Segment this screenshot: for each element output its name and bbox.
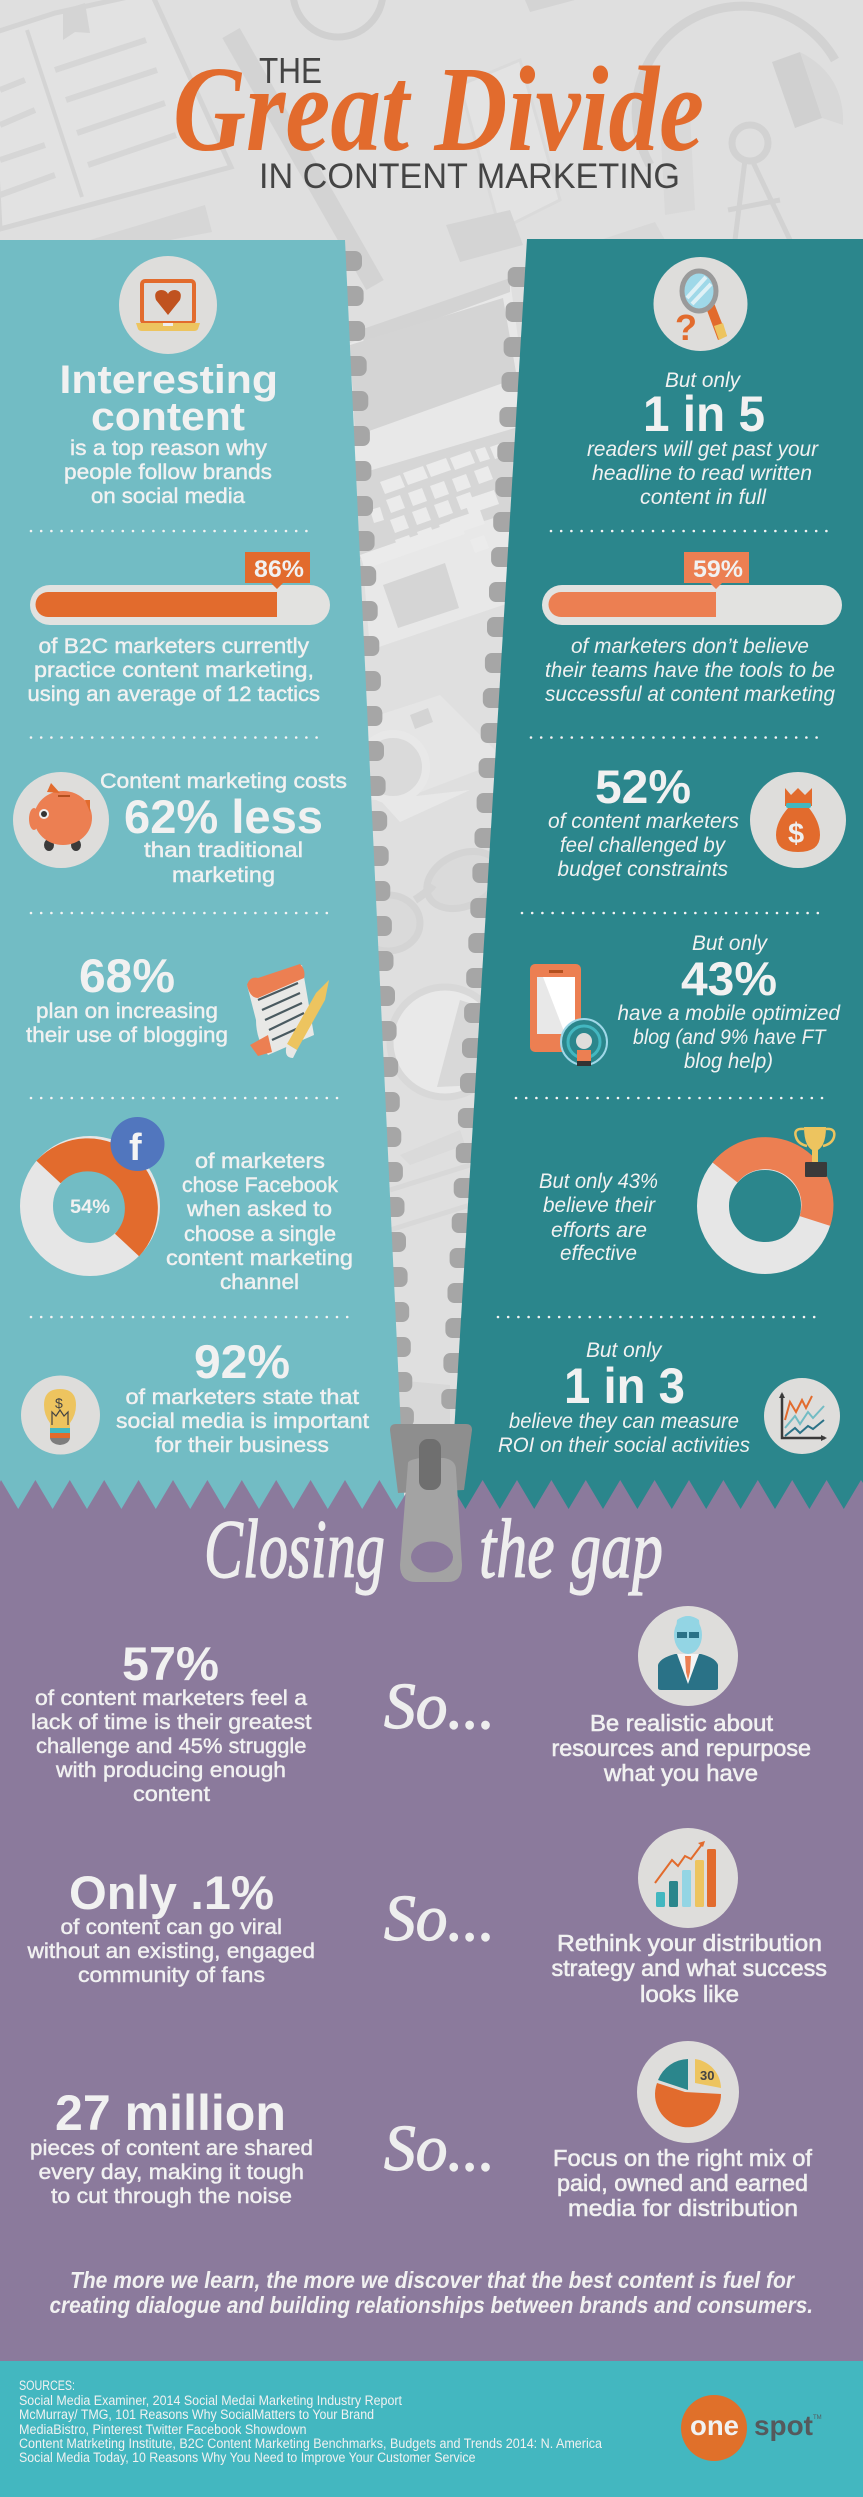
block: 86% progress: of B2C marketers currently [38, 635, 310, 658]
row 1: 57%: content [133, 1783, 210, 1806]
panel: left column [0, 240, 405, 1515]
sources: MediaBistro, Pinterest Twitter Facebook Showdown [19, 2422, 306, 2437]
block: 1 in 5: 1 in 5 [643, 386, 765, 442]
row 2: only .1%: strategy and what success [552, 1955, 827, 1981]
block: 68% blogging [26, 949, 329, 1058]
icon: pie chart: 30 [700, 2068, 714, 2083]
block: interesting content: is a top reason why [70, 437, 268, 460]
logo: onespot [681, 2395, 822, 2461]
row 2: only .1%: of content can go viral [60, 1916, 282, 1939]
icon: light bulb: $ [55, 1395, 63, 1411]
block: 43% effective [539, 1127, 834, 1265]
block: 86% progress [28, 552, 330, 706]
block: 52% [548, 760, 846, 881]
row 2: only .1% [26, 1828, 827, 2007]
block: 62% less: 62% less [124, 790, 323, 843]
block: 68% blogging: plan on increasing [36, 1000, 218, 1023]
logo: onespot: TM [813, 2415, 822, 2421]
closing statement: The more we learn, the more we discover that the best content is fuel for [70, 2267, 795, 2293]
block: 62% less [13, 770, 347, 887]
block: 1 in 3 [498, 1339, 840, 1457]
icon: phone with signal [530, 964, 607, 1066]
block: 86% progress: using an average of 12 tactics [28, 683, 320, 706]
dotted dividers [31, 531, 832, 1317]
block: 59% progress: of marketers don’t believe [571, 635, 809, 658]
block: interesting content: people follow brands [64, 461, 272, 484]
background: camera [360, 695, 505, 822]
title: Great Divide [173, 42, 704, 177]
row 3: 27 million: pieces of content are shared [30, 2137, 313, 2160]
row 2: only .1%: community of fans [78, 1964, 265, 1987]
zipper teeth: left [338, 251, 414, 1427]
block: 1 in 3: believe they can measure [509, 1410, 739, 1433]
block: 1 in 3: ROI on their social activities [498, 1434, 750, 1457]
icon: facebook [110, 1117, 164, 1171]
heading: closing the gap: Closing [204, 1503, 385, 1596]
background: desk items [0, 0, 843, 285]
icon: trophy [795, 1127, 834, 1177]
block: 59% progress [542, 552, 842, 706]
icon: bar chart [638, 1828, 738, 1928]
block: 43% effective: But only 43% [539, 1170, 658, 1193]
so...: So... [384, 1882, 495, 1955]
block: 43% mobile: blog help) [684, 1050, 773, 1073]
sources: Social Media Today, 10 Reasons Why You Need to Improve Your Customer Service [19, 2450, 476, 2465]
block: 52%: budget constraints [558, 858, 728, 881]
block: 43% effective: believe their [543, 1194, 656, 1217]
purple section background [0, 1480, 863, 2361]
icon: money bag [750, 772, 846, 868]
block: interesting content: content [91, 395, 245, 439]
icon: piggy bank [13, 772, 109, 868]
block: 43% effective: effective [560, 1242, 637, 1265]
logo: onespot: one [690, 2410, 739, 2441]
block: 92%: for their business [155, 1434, 329, 1457]
block: 54% facebook: choose a single [184, 1223, 336, 1246]
chart: donut 43% [713, 1153, 817, 1258]
block: 52%: feel challenged by [560, 834, 726, 857]
block: 52%: of content marketers [548, 810, 739, 833]
row 1: 57%: resources and repurpose [552, 1735, 811, 1761]
background: glasses [356, 840, 508, 951]
block: 86% progress: 86% [254, 556, 304, 583]
zipper teeth: right [441, 267, 532, 1409]
row 1: 57%: of content marketers feel a [35, 1687, 307, 1710]
so...: So... [384, 2112, 495, 2185]
icon: businessman [638, 1606, 738, 1706]
footer background [0, 2361, 863, 2497]
block: 1 in 5: content in full [640, 486, 767, 509]
row 3: 27 million [30, 2041, 813, 2221]
chart: donut 54% [36, 1152, 144, 1260]
row 3: 27 million: Focus on the right mix of [553, 2145, 813, 2171]
logo: onespot: spot [754, 2410, 813, 2441]
row 1: 57%: Be realistic about [590, 1710, 774, 1736]
row 3: 27 million: 27 million [55, 2085, 286, 2141]
block: 54% facebook: content marketing [166, 1247, 353, 1270]
row 2: only .1%: without an existing, engaged [26, 1940, 315, 1963]
block: 68% blogging: their use of blogging [26, 1024, 228, 1047]
block: interesting content [60, 256, 278, 508]
block: 92% [21, 1335, 369, 1457]
icon: magnifier and question mark: ? [675, 307, 697, 348]
heading: closing the gap: the gap [479, 1503, 663, 1596]
row 2: only .1%: looks like [640, 1981, 739, 2007]
closing statement [50, 2267, 813, 2318]
block: 1 in 5: headline to read written [592, 462, 812, 485]
sources: Social Media Examiner, 2014 Social Medai Marketing Industry Report [19, 2393, 402, 2408]
block: 43% mobile: blog (and 9% have FT [633, 1026, 828, 1049]
block: 54% facebook: channel [220, 1271, 299, 1294]
block: 68% blogging: 68% [79, 949, 175, 1002]
zipper pull [390, 1424, 472, 1582]
block: 59% progress: successful at content marketing [545, 683, 835, 706]
block: 43% mobile [530, 932, 841, 1073]
icon: scroll and pencil [247, 964, 329, 1058]
chart: donut 54%: 54% [70, 1197, 110, 1218]
title: THE [259, 50, 322, 91]
block: interesting content: Interesting [60, 358, 278, 402]
block: 43% mobile: 43% [681, 952, 777, 1005]
block: 52%: 52% [595, 760, 691, 813]
icon: pie chart [637, 2041, 739, 2143]
block: 62% less: than traditional [144, 839, 303, 862]
row 1: 57%: with producing enough [55, 1759, 286, 1782]
block: 1 in 3: But only [586, 1339, 663, 1362]
icon: money bag: $ [788, 818, 804, 850]
icon: light bulb [21, 1376, 100, 1454]
row 1: 57%: what you have [603, 1760, 758, 1786]
row 2: only .1%: Only .1% [69, 1866, 274, 1919]
block: 54% facebook: when asked to [186, 1198, 332, 1221]
row 1: 57% [31, 1606, 811, 1806]
so...: So... [384, 1670, 495, 1743]
row 1: 57%: 57% [122, 1637, 219, 1690]
sources [19, 2378, 602, 2465]
block: 54% facebook: chose Facebook [182, 1174, 338, 1197]
row 1: 57%: challenge and 45% struggle [36, 1735, 306, 1758]
row 3: 27 million: every day, making it tough [38, 2161, 304, 2184]
row 2: only .1%: Rethink your distribution [557, 1930, 822, 1956]
block: 59% progress: their teams have the tools to be [545, 659, 835, 682]
block: 1 in 5: readers will get past your [587, 438, 819, 461]
block: 43% effective: efforts are [551, 1219, 647, 1242]
block: 43% mobile: have a mobile optimized [618, 1002, 841, 1025]
heading: closing the gap [204, 1503, 663, 1596]
row 3: 27 million: media for distribution [568, 2195, 798, 2221]
background: round clock [390, 987, 500, 1440]
block: 62% less: marketing [172, 864, 275, 887]
row 1: 57%: lack of time is their greatest [31, 1711, 312, 1734]
block: 1 in 3: 1 in 3 [564, 1358, 685, 1414]
block: 54% facebook [36, 1117, 353, 1294]
sources: SOURCES: [19, 2378, 75, 2393]
title: IN CONTENT MARKETING [259, 157, 680, 196]
block: 43% mobile: But only [692, 932, 768, 955]
background: laptop and keyboard [345, 278, 528, 650]
block: 59% progress: 59% [693, 556, 743, 583]
block: 86% progress: practice content marketing, [34, 659, 314, 682]
sources: Content Matrketing Institute, B2C Content Marketing Benchmarks, Budgets and Trends 2014: N. America [19, 2436, 602, 2451]
block: 62% less: Content marketing costs [100, 770, 347, 793]
block: 1 in 5 [587, 257, 819, 509]
block: 54% facebook: of marketers [195, 1150, 325, 1173]
sources: McMurray/ TMG, 101 Reasons Why SocialMatters to Your Brand [19, 2407, 374, 2422]
row 3: 27 million: paid, owned and earned [557, 2170, 808, 2196]
icon: trend chart [764, 1378, 840, 1454]
block: 92%: of marketers state that [126, 1386, 359, 1409]
icon: facebook: f [129, 1127, 142, 1169]
block: 92%: 92% [194, 1335, 290, 1388]
icon: magnifier and question mark [654, 257, 748, 351]
block: 1 in 5: But only [665, 369, 741, 392]
icon: laptop with heart [119, 256, 217, 354]
panel: right column [449, 239, 863, 1515]
block: interesting content: on social media [91, 485, 245, 508]
row 3: 27 million: to cut through the noise [51, 2185, 292, 2208]
block: 92%: social media is important [116, 1410, 369, 1433]
